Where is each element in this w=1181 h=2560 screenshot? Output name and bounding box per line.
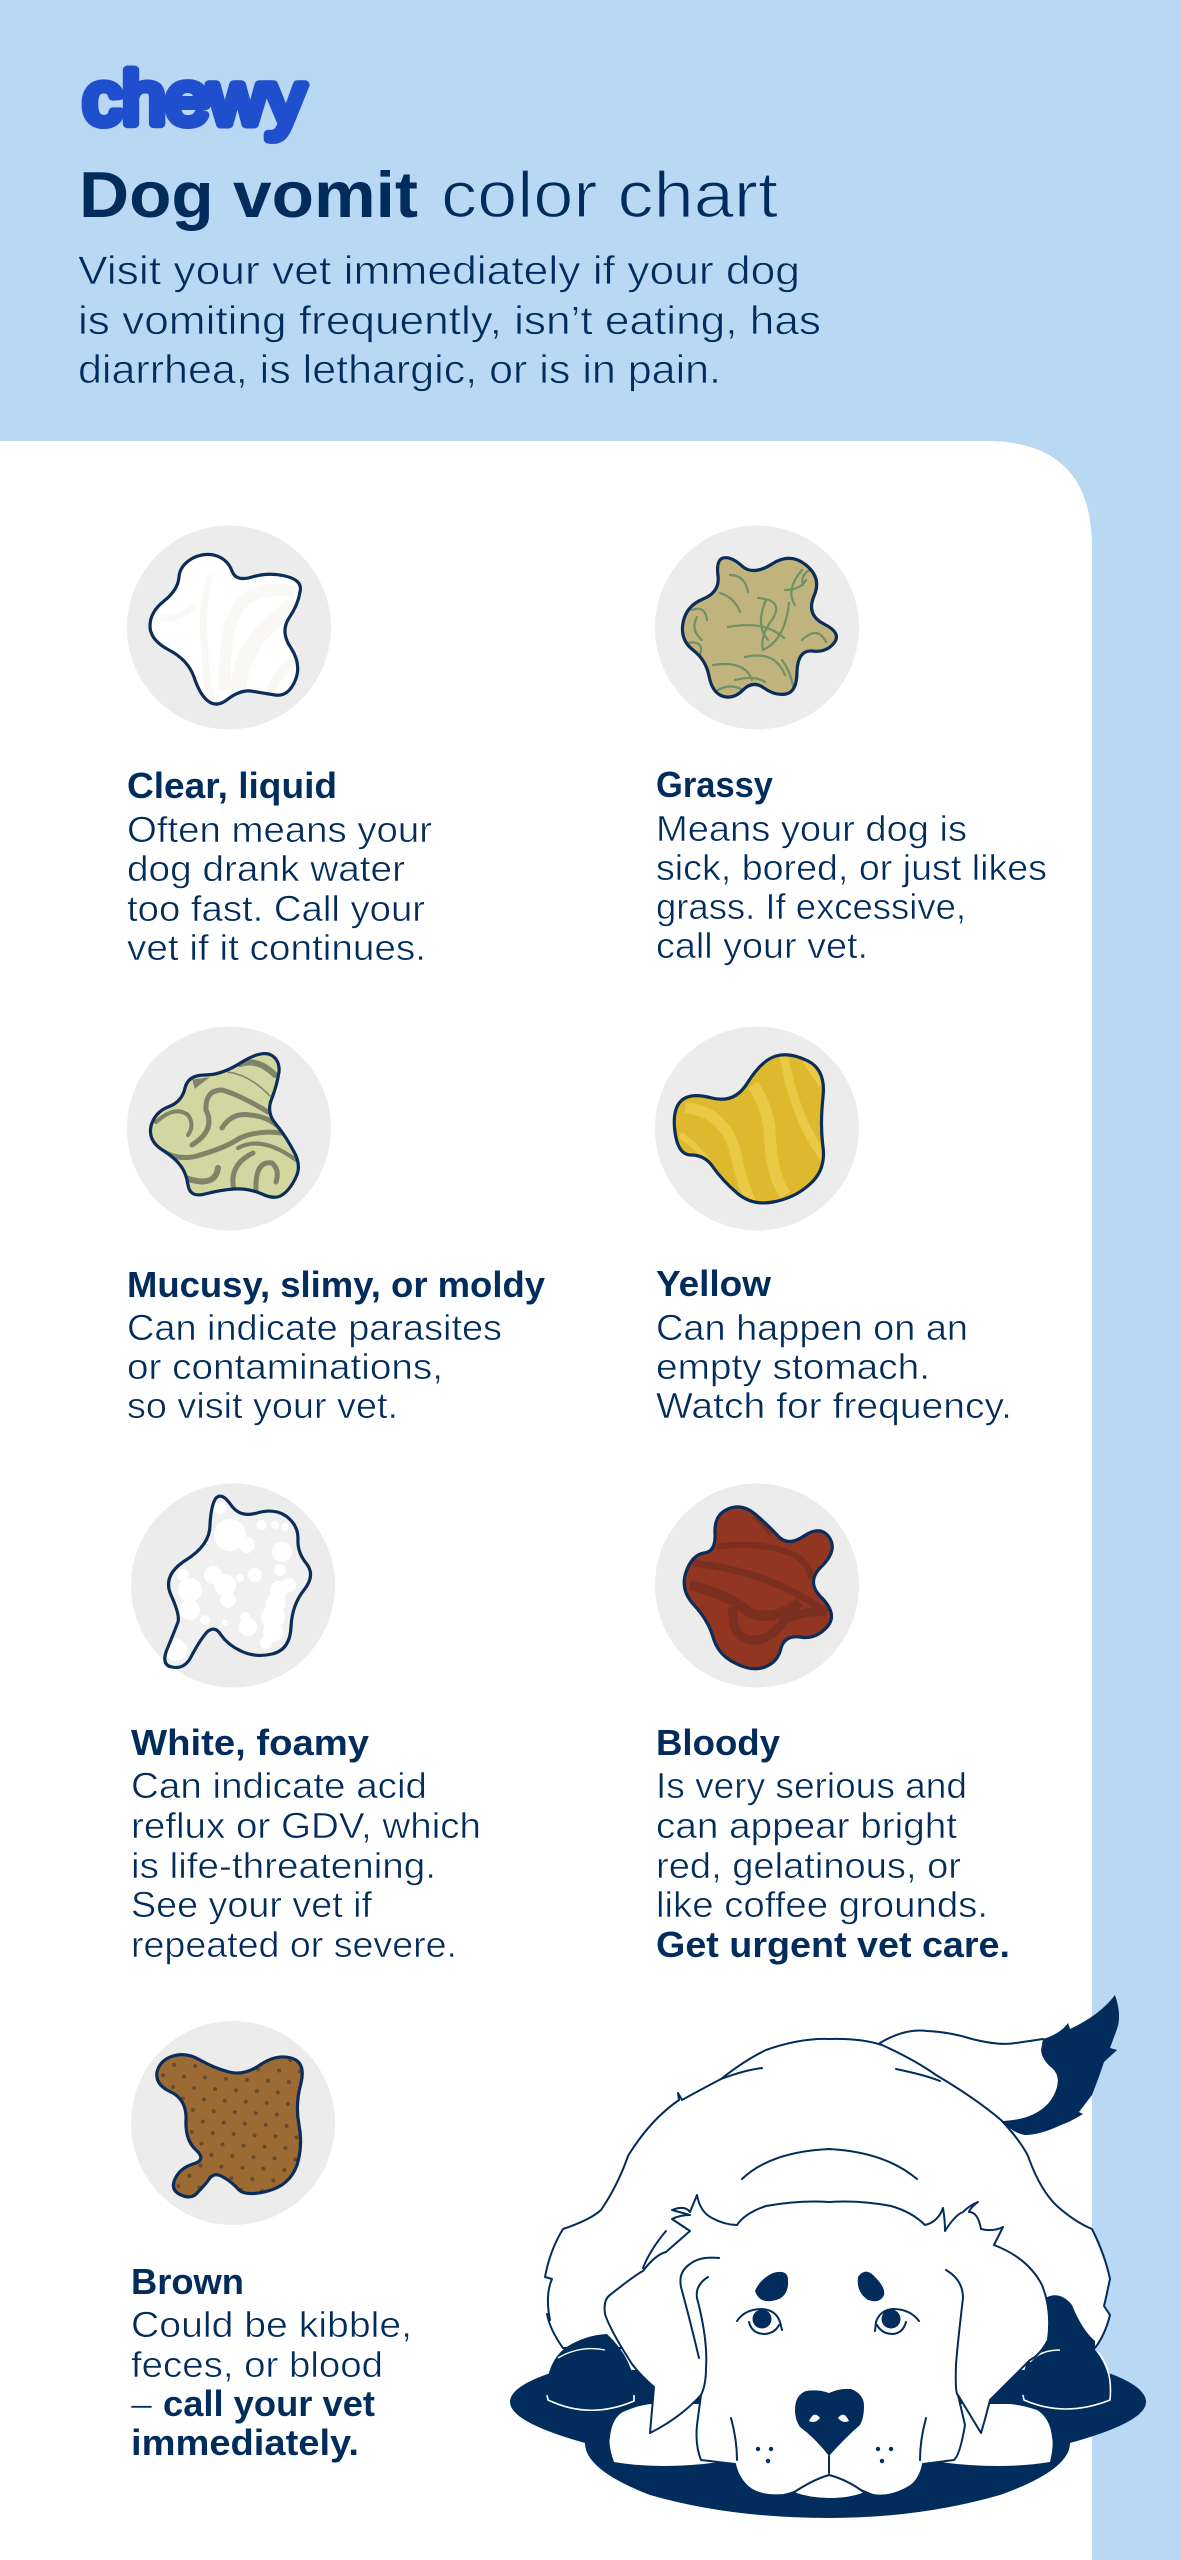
text: clear, liquid description: vet if it continues.	[127, 927, 426, 968]
heading: brown: Brown	[131, 2261, 244, 2302]
text: white, foamy description: is life-threatening.	[131, 1845, 436, 1886]
heading: white, foamy: White, foamy	[131, 1722, 369, 1763]
text: bloody description: like coffee grounds.	[656, 1884, 988, 1925]
heading: clear, liquid: Clear, liquid	[127, 765, 337, 806]
text: clear, liquid description: Often means your	[127, 809, 432, 850]
panel: yellow	[655, 1026, 1012, 1426]
icon: yellow vomit	[655, 1026, 859, 1230]
text: grassy description: sick, bored, or just likes	[656, 847, 1047, 888]
panel: clear, liquid	[127, 526, 432, 968]
text: mucusy description: Can indicate parasites	[127, 1307, 502, 1348]
text: white, foamy description: Can indicate acid	[131, 1765, 427, 1806]
text: bloody description: Is very serious and	[656, 1765, 967, 1806]
subtitle warning text: is vomiting frequently, isn’t eating, has	[78, 299, 821, 343]
icon: bloody vomit	[655, 1484, 859, 1688]
text: clear, liquid description	[127, 809, 432, 968]
front paws	[610, 2404, 1053, 2466]
text: white, foamy description	[131, 1765, 481, 1965]
title	[79, 158, 778, 231]
subtitle warning text	[78, 249, 821, 392]
text: bloody description: red, gelatinous, or	[656, 1845, 961, 1886]
icon: grassy vomit	[655, 526, 859, 730]
text: bloody description: can appear bright	[656, 1805, 957, 1846]
heading: bloody: Bloody	[656, 1722, 780, 1763]
text: yellow description: empty stomach.	[656, 1346, 930, 1387]
text: brown description: call your vet	[163, 2383, 375, 2424]
dog tail	[880, 1995, 1119, 2135]
panel: brown	[131, 2021, 412, 2463]
text: clear, liquid description: dog drank water	[127, 848, 405, 889]
dog nose	[795, 2389, 864, 2456]
right rear paw	[1022, 2348, 1110, 2409]
icon: mucusy vomit	[127, 1026, 331, 1230]
text: brown description: –	[131, 2383, 152, 2424]
text: yellow description	[656, 1307, 1012, 1426]
text: mucusy description: or contaminations,	[127, 1346, 443, 1387]
text: yellow description: Can happen on an	[656, 1307, 968, 1348]
panel: white, foamy	[131, 1484, 481, 1965]
text: grassy description	[656, 808, 1047, 966]
logo: chewy: chewy	[83, 57, 305, 140]
subtitle warning text: diarrhea, is lethargic, or is in pain.	[78, 348, 721, 392]
text: grassy description: call your vet.	[656, 925, 868, 966]
dog left eye	[737, 2309, 782, 2334]
title: Dog vomit	[79, 158, 418, 231]
title: color chart	[441, 158, 778, 231]
panel: white content card	[0, 441, 1092, 2560]
panel: grassy	[655, 526, 1047, 966]
dog eyebrows	[755, 2272, 884, 2301]
text: brown description	[131, 2304, 412, 2463]
dog body fold lines	[721, 2068, 940, 2179]
dog body	[545, 2039, 1110, 2348]
text: yellow description: Watch for frequency.	[656, 1385, 1012, 1426]
dog lip	[793, 2475, 865, 2499]
heading: yellow: Yellow	[656, 1263, 772, 1304]
heading: grassy: Grassy	[656, 764, 773, 805]
dog shadow	[510, 2370, 1146, 2518]
text: grassy description: grass. If excessive,	[656, 886, 966, 927]
panel: mucusy	[127, 1026, 545, 1426]
left rear paw	[547, 2334, 635, 2410]
dog haunch behind ear	[1040, 2295, 1095, 2380]
dog ear and muzzle lines	[643, 2231, 963, 2473]
illustration: sad dog lying down	[510, 1995, 1146, 2518]
text: brown description: immediately.	[131, 2422, 359, 2463]
subtitle warning text: Visit your vet immediately if your dog	[78, 249, 800, 293]
text: brown description: feces, or blood	[131, 2344, 383, 2385]
dog whisker dots	[756, 2447, 893, 2463]
icon: clear vomit	[127, 526, 331, 730]
dog right eye	[875, 2309, 919, 2334]
panel: bloody	[655, 1484, 1010, 1965]
text: mucusy description	[127, 1307, 502, 1426]
text: clear, liquid description: too fast. Call your	[127, 888, 425, 929]
text: bloody description	[656, 1765, 1010, 1965]
text: mucusy description: so visit your vet.	[127, 1385, 398, 1426]
heading: mucusy: Mucusy, slimy, or moldy	[127, 1264, 545, 1305]
text: white, foamy description: See your vet if	[131, 1884, 373, 1925]
icon: brown vomit	[131, 2021, 335, 2225]
text: brown description: Could be kibble,	[131, 2304, 412, 2345]
text: white, foamy description: repeated or severe.	[131, 1924, 457, 1965]
text: white, foamy description: reflux or GDV, which	[131, 1805, 481, 1846]
dog head and ears	[605, 2195, 1049, 2496]
icon: foamy vomit	[131, 1484, 335, 1688]
text: bloody description: Get urgent vet care.	[656, 1924, 1010, 1965]
text: grassy description: Means your dog is	[656, 808, 967, 849]
